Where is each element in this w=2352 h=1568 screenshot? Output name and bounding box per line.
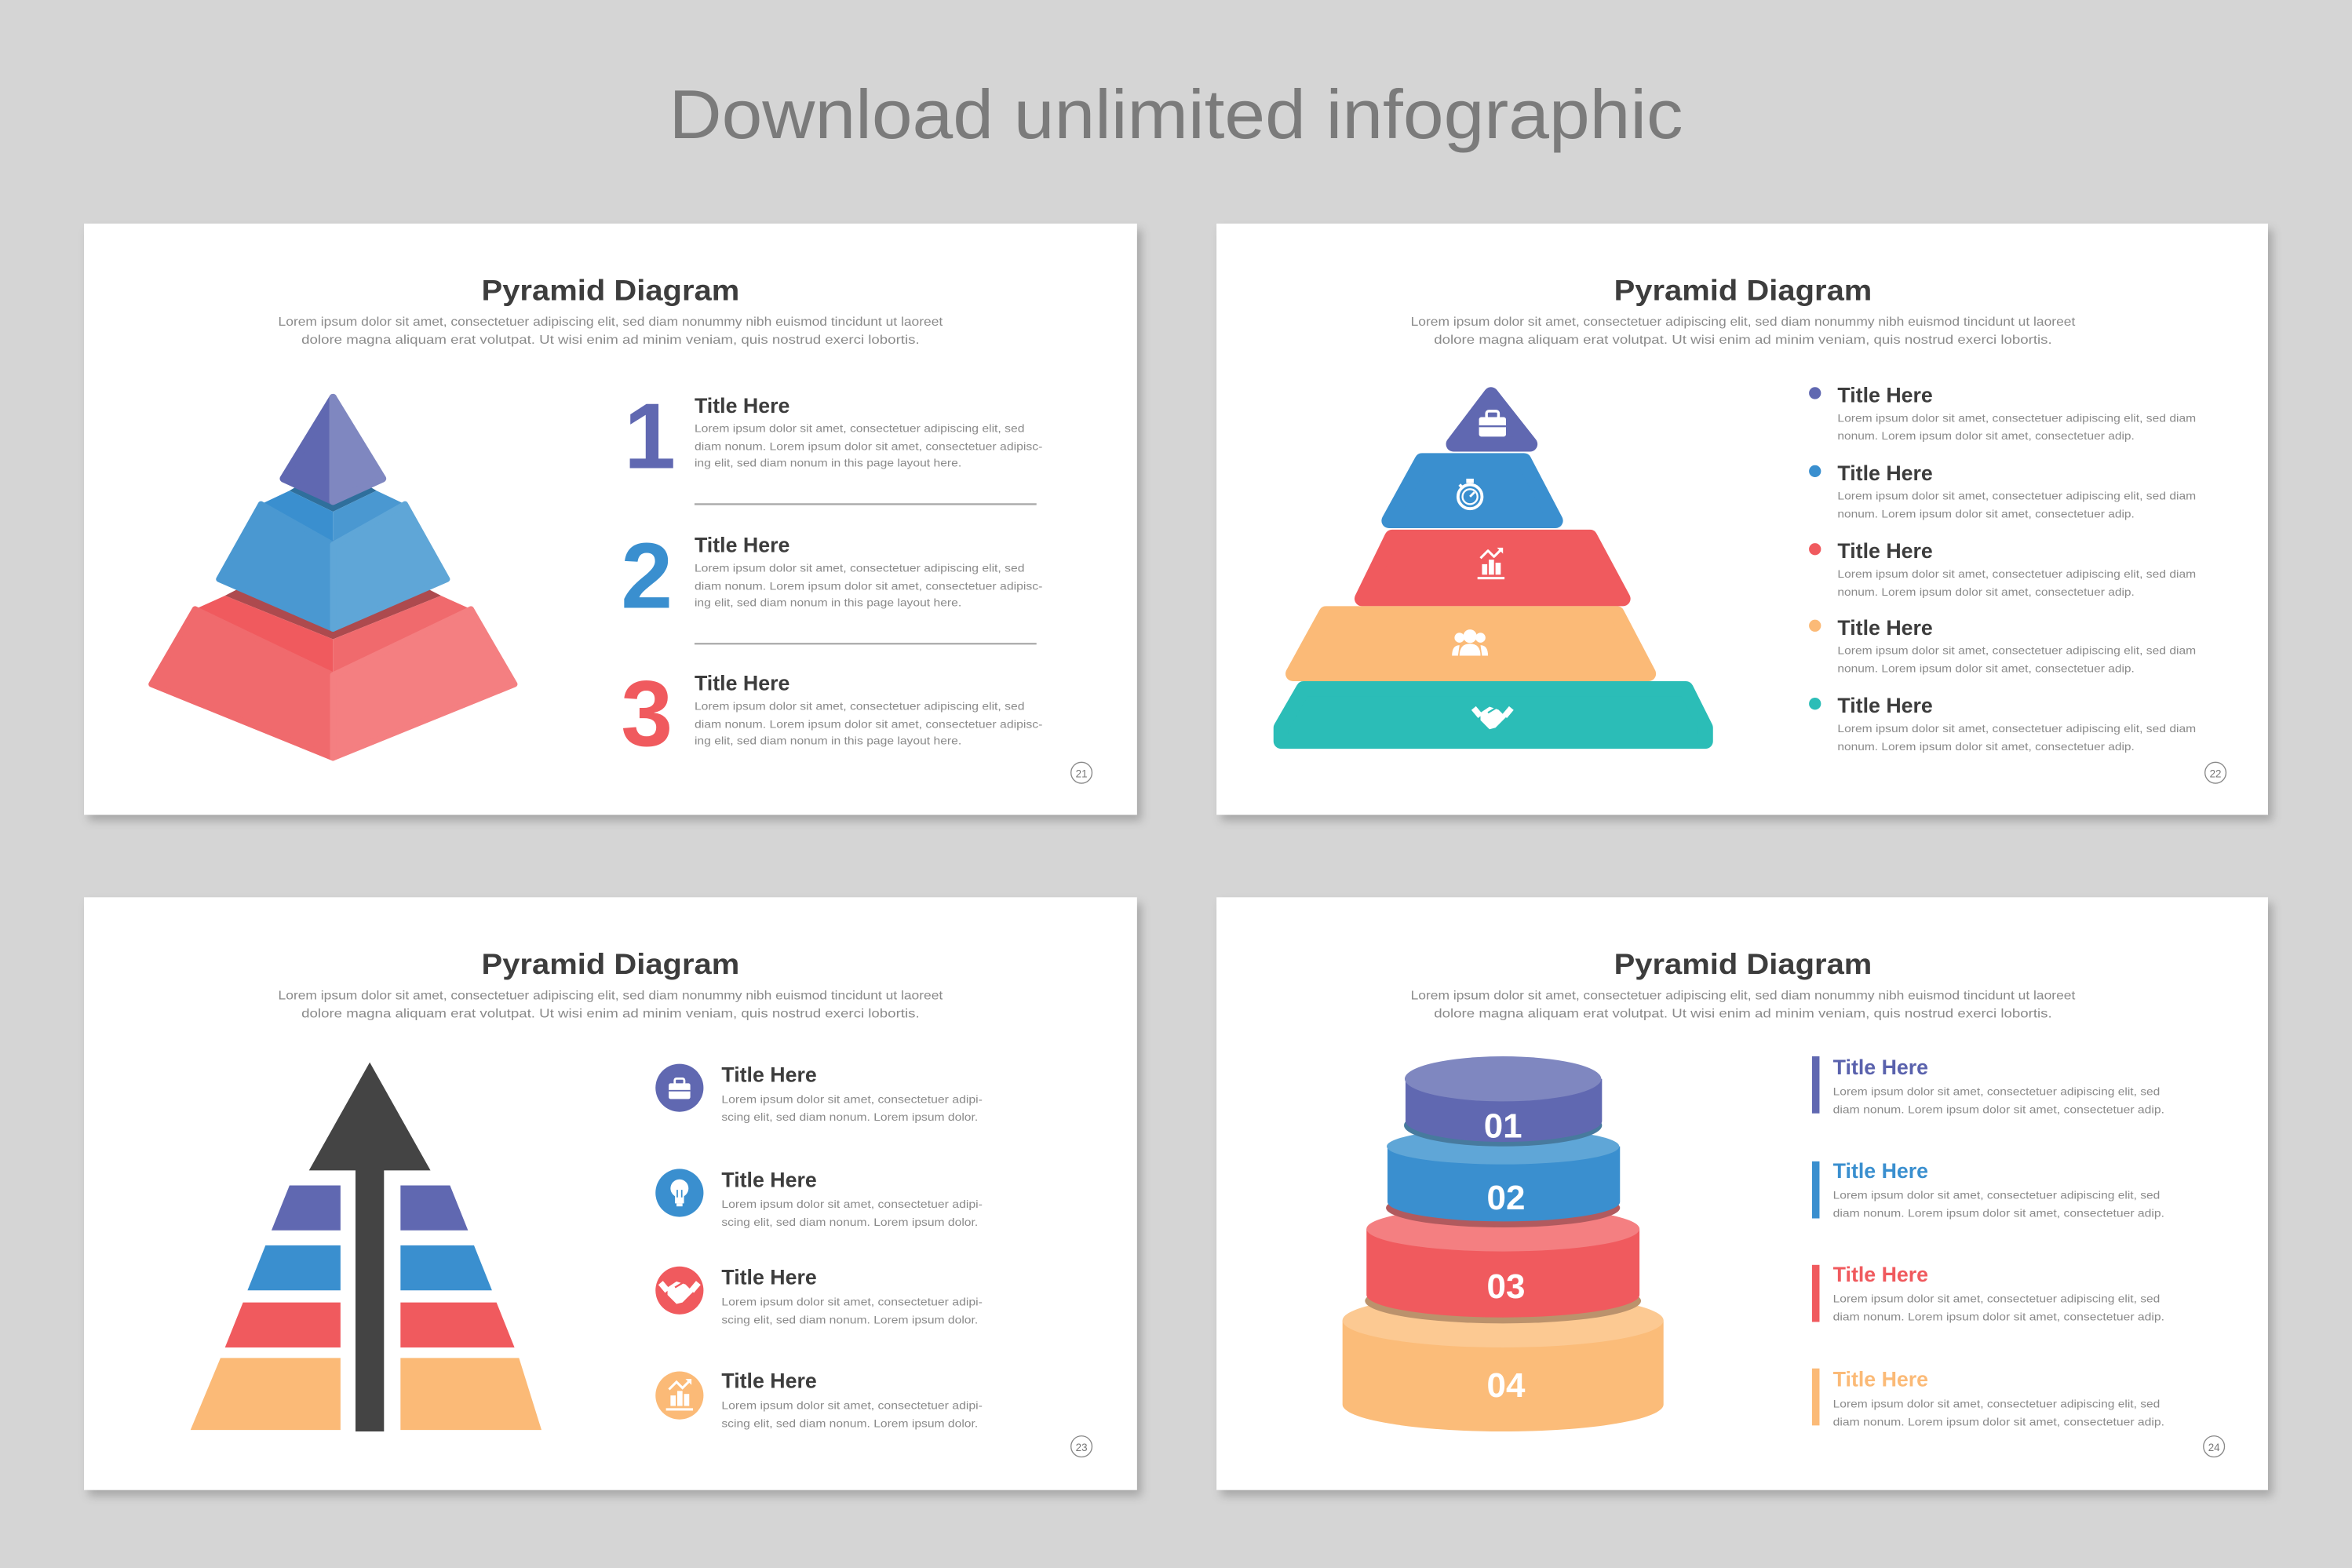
list: Lorem ipsum dolor sit amet, consectetuer adipiscing elit, sed [1833,1086,2160,1098]
list: Title Here [1833,1368,1928,1391]
chart: stacked cylinders [1343,1056,1664,1431]
page number [2205,762,2226,783]
chart: layered pyramid [1281,395,1705,742]
list: Lorem ipsum dolor sit amet, consectetuer adipi- [721,1093,983,1105]
item 1: Title Here [695,394,789,418]
page number [2204,1436,2225,1457]
list: Lorem ipsum dolor sit amet, consectetuer adipiscing elit, sed [1833,1190,2160,1202]
chart: stacked cylinders: 02 [1487,1179,1525,1217]
list: nonum. Lorem ipsum dolor sit amet, consectetuer adip. [1837,663,2135,675]
item 2: 2 [621,524,673,628]
list: scing elit, sed diam nonum. Lorem ipsum dolor. [721,1216,978,1228]
item 3: 3 [621,662,673,766]
panel heading: Pyramid Diagram [482,947,739,980]
chart: 3D pyramid [151,398,515,758]
list: Lorem ipsum dolor sit amet, consectetuer adipiscing elit, sed [1833,1293,2160,1305]
list: Title Here [721,1369,817,1393]
panel subtitle [1411,315,2076,347]
list: Lorem ipsum dolor sit amet, consectetuer adipiscing elit, sed diam [1837,723,2196,735]
list: diam nonum. Lorem ipsum dolor sit amet, consectetuer adip. [1833,1416,2164,1428]
list: nonum. Lorem ipsum dolor sit amet, consectetuer adip. [1837,586,2135,598]
list: Title Here [1837,616,1933,640]
panel subtitle: dolore magna aliquam erat volutpat. Ut wisi enim ad minim veniam, quis nostrud exerci lobortis. [301,1007,920,1020]
list: nonum. Lorem ipsum dolor sit amet, consectetuer adip. [1837,509,2135,520]
list [1809,383,2196,753]
panel subtitle: Lorem ipsum dolor sit amet, consectetuer adipiscing elit, sed diam nonummy nibh euismod tincidunt ut laoreet [1411,989,2076,1002]
list: Lorem ipsum dolor sit amet, consectetuer adipi- [721,1399,983,1411]
item 3: Title Here [695,671,789,695]
chart: stacked cylinders: 03 [1487,1267,1525,1306]
title: Download unlimited infographic [669,75,1683,153]
list [1812,1056,2164,1428]
list: Title Here [1837,383,1933,407]
panel subtitle [279,989,943,1020]
chart: stacked cylinders: 04 [1487,1366,1526,1405]
list: scing elit, sed diam nonum. Lorem ipsum dolor. [721,1111,978,1123]
item 3: Lorem ipsum dolor sit amet, consectetuer adipiscing elit, sed [695,700,1024,712]
item 1: 1 [624,385,676,489]
list: Title Here [721,1266,817,1289]
list: Title Here [1837,539,1933,563]
list: nonum. Lorem ipsum dolor sit amet, consectetuer adip. [1837,741,2135,753]
list: Title Here [1833,1263,1928,1286]
panel subtitle [279,315,943,347]
panel: layered icon pyramid [1216,224,2268,815]
list: Lorem ipsum dolor sit amet, consectetuer adipiscing elit, sed diam [1837,568,2196,580]
panel heading: Pyramid Diagram [1614,273,1872,306]
item 3: ing elit, sed diam nonum in this page layout here. [695,735,961,746]
page number: 24 [2208,1442,2220,1453]
list: Lorem ipsum dolor sit amet, consectetuer adipi- [721,1296,983,1307]
chart: arrow pyramid [191,1063,542,1431]
item 1: ing elit, sed diam nonum in this page layout here. [695,458,961,469]
list: Lorem ipsum dolor sit amet, consectetuer adipiscing elit, sed diam [1837,645,2196,657]
list: scing elit, sed diam nonum. Lorem ipsum dolor. [721,1417,978,1429]
item 2: Title Here [695,534,789,557]
page number: 23 [1076,1442,1088,1453]
item 1: Lorem ipsum dolor sit amet, consectetuer adipiscing elit, sed [695,423,1024,435]
item 3 [621,662,1042,766]
panel: isometric pyramid [84,224,1137,815]
page number: 21 [1076,768,1088,779]
panel subtitle: Lorem ipsum dolor sit amet, consectetuer adipiscing elit, sed diam nonummy nibh euismod tincidunt ut laoreet [1411,315,2076,329]
page number: 22 [2210,768,2222,779]
list: Lorem ipsum dolor sit amet, consectetuer adipiscing elit, sed [1833,1398,2160,1409]
list: Lorem ipsum dolor sit amet, consectetuer adipiscing elit, sed diam [1837,412,2196,424]
list: diam nonum. Lorem ipsum dolor sit amet, consectetuer adip. [1833,1104,2164,1116]
item 2: ing elit, sed diam nonum in this page layout here. [695,596,961,608]
panel: arrow pyramid [84,897,1137,1490]
list: Title Here [1837,694,1933,717]
list: nonum. Lorem ipsum dolor sit amet, consectetuer adip. [1837,430,2135,442]
panel: cylinder pyramid [1216,897,2268,1490]
panel subtitle: dolore magna aliquam erat volutpat. Ut wisi enim ad minim veniam, quis nostrud exerci lobortis. [1434,334,2052,347]
item 2 [621,524,1042,628]
item 1 [624,385,1042,489]
list: scing elit, sed diam nonum. Lorem ipsum dolor. [721,1314,978,1326]
list: diam nonum. Lorem ipsum dolor sit amet, consectetuer adip. [1833,1311,2164,1323]
panel subtitle: Lorem ipsum dolor sit amet, consectetuer adipiscing elit, sed diam nonummy nibh euismod tincidunt ut laoreet [279,315,943,329]
item 2: Lorem ipsum dolor sit amet, consectetuer adipiscing elit, sed [695,562,1024,574]
list: Lorem ipsum dolor sit amet, consectetuer adipiscing elit, sed diam [1837,490,2196,502]
panel subtitle: Lorem ipsum dolor sit amet, consectetuer adipiscing elit, sed diam nonummy nibh euismod tincidunt ut laoreet [279,989,943,1002]
list: Title Here [721,1063,817,1087]
chart: stacked cylinders: 01 [1484,1107,1522,1145]
item 3: diam nonum. Lorem ipsum dolor sit amet, consectetuer adipisc- [695,718,1042,730]
item 1: diam nonum. Lorem ipsum dolor sit amet, consectetuer adipisc- [695,441,1042,453]
arrow [309,1063,431,1431]
panel heading: Pyramid Diagram [1614,947,1872,980]
page number [1071,1436,1092,1457]
panel subtitle: dolore magna aliquam erat volutpat. Ut wisi enim ad minim veniam, quis nostrud exerci lobortis. [1434,1007,2052,1020]
list: diam nonum. Lorem ipsum dolor sit amet, consectetuer adip. [1833,1208,2164,1220]
panel subtitle: dolore magna aliquam erat volutpat. Ut wisi enim ad minim veniam, quis nostrud exerci lobortis. [301,334,920,347]
list: Title Here [1833,1159,1928,1183]
panel subtitle [1411,989,2076,1020]
item 2: diam nonum. Lorem ipsum dolor sit amet, consectetuer adipisc- [695,580,1042,592]
list: Title Here [1833,1056,1928,1079]
list [655,1063,983,1429]
list: Title Here [721,1168,817,1191]
page number [1071,762,1092,783]
list: Lorem ipsum dolor sit amet, consectetuer adipi- [721,1198,983,1210]
list: Title Here [1837,461,1933,485]
panel heading: Pyramid Diagram [482,273,739,306]
